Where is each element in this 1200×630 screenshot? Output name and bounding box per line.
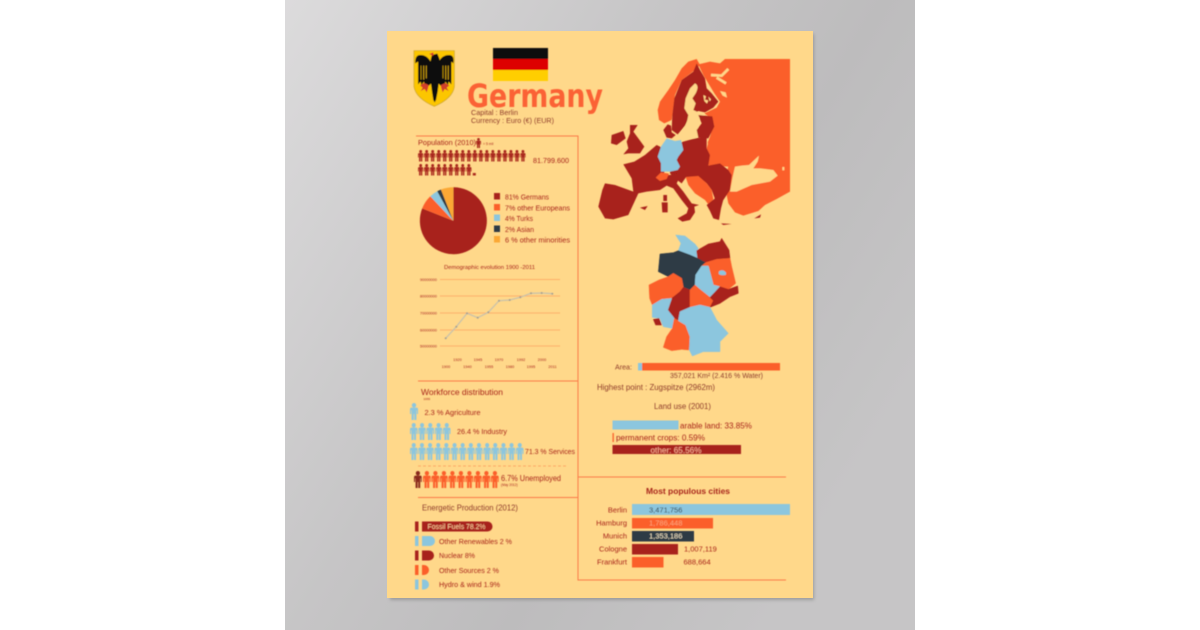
area value: 357,021 Km² (2.416 % Water) [670, 371, 763, 380]
y axis labels: 60000000 [420, 328, 437, 332]
x axis labels: 1992 [517, 358, 525, 362]
highest point: Highest point : Zugspitze (2962m) [597, 383, 715, 392]
Norway [658, 59, 700, 123]
Cologne bar: 1,007,119 [684, 544, 717, 554]
Balkans [686, 176, 713, 207]
Ireland [611, 131, 626, 145]
workforce heading: Workforce distribution [421, 387, 503, 397]
x axis labels: 2000 [538, 358, 546, 362]
pie legend: 4% Turks [505, 214, 533, 223]
x axis labels: 1955 [485, 365, 493, 369]
workforce pictogram: agriculture [410, 403, 480, 420]
Baden-Wurttemberg [663, 318, 690, 351]
workforce pictogram: services: 71.3 % Services [525, 447, 575, 456]
energy bar: other renewables: Other Renewables 2 % [439, 537, 512, 546]
workforce pictogram: services [410, 443, 575, 460]
x axis labels: 1945 [474, 358, 482, 362]
area label: Area: [615, 362, 632, 372]
x axis labels: 1995 [527, 365, 535, 369]
energy bar: nuclear [415, 550, 475, 560]
land use heading: Land use (2001) [654, 402, 711, 411]
y axis labels [420, 278, 437, 348]
land use block [612, 402, 752, 455]
city bar chart [596, 504, 790, 568]
Brandenburg [702, 258, 736, 289]
Hesse [668, 287, 690, 321]
White Sea [711, 69, 728, 83]
y axis labels: 70000000 [420, 312, 437, 316]
Greece and islands [640, 195, 732, 225]
Frankfurt bar: Frankfurt [597, 558, 628, 566]
Bavaria [678, 305, 728, 356]
North Rhine-Westphalia [649, 273, 683, 305]
x axis labels: 2011 [548, 365, 557, 369]
x axis labels [442, 358, 557, 369]
land use bar: arable: arable land: 33.85% [680, 422, 752, 430]
northern Europe [658, 59, 790, 155]
Great Britain [623, 125, 644, 154]
cities heading: Most populous cities [646, 487, 730, 496]
icon: German coat of arms [414, 51, 454, 106]
Thuringia [690, 285, 713, 307]
Schleswig-Holstein [676, 235, 698, 258]
Sweden and Finland [672, 63, 718, 134]
y axis labels: 80000000 [420, 294, 437, 298]
x axis labels: 1920 [453, 358, 462, 362]
grey wall background [285, 0, 915, 630]
map: German states [649, 235, 738, 356]
area block [597, 362, 780, 392]
Hamburg bar [596, 518, 713, 528]
capital and currency: Capital : Berlin [471, 108, 518, 117]
Cologne bar: Cologne [599, 544, 627, 554]
energy bar: other sources: Other Sources 2 % [439, 566, 499, 575]
Lake Onega [720, 91, 727, 98]
pie legend: 6 % other minorities [505, 236, 570, 244]
area bar [638, 363, 780, 370]
energy bar: fossil fuels: Fossil Fuels 78.2% [428, 522, 486, 531]
land use bar: permanent crops: permanent crops: 0.59% [616, 434, 705, 442]
row of persons one [418, 150, 526, 162]
population pictogram [418, 138, 569, 176]
title: Germany [467, 77, 603, 115]
pie legend: 7% other Europeans [505, 204, 570, 212]
population heading: Population (2010) [418, 138, 476, 147]
Frankfurt bar: 688,664 [684, 558, 711, 566]
Finnish lakes [703, 95, 711, 104]
Denmark [663, 124, 676, 138]
Russia, Ukraine and Turkey [707, 125, 790, 216]
Munich bar [603, 531, 694, 542]
panel frame lines [416, 136, 786, 580]
energy bar: nuclear: Nuclear 8% [439, 551, 475, 560]
poster shadow [390, 34, 814, 600]
workforce year note: 1955 [424, 397, 431, 401]
Black Sea [730, 156, 778, 192]
unemployment pictogram: (May 2012) [501, 483, 518, 487]
land use bar: other: other: 65.56% [650, 446, 702, 455]
row of persons two [418, 164, 476, 176]
population line [445, 292, 553, 339]
Berlin bar: Berlin [608, 506, 627, 514]
southern Europe [598, 125, 790, 225]
unemployment pictogram [414, 471, 561, 488]
icon: flag of Germany [493, 48, 548, 81]
Munich bar: Munich [603, 532, 627, 540]
workforce pictogram: industry: 26.4 % Industry [457, 427, 507, 436]
energy bar: other renewables [415, 536, 512, 546]
Gulf of Bothnia and Baltic Sea [680, 83, 705, 138]
icon: legend person [476, 138, 481, 148]
Hamburg bar: 1,786,448 [649, 518, 682, 528]
Cyprus [754, 214, 761, 218]
pie legend: 2% Asian [505, 225, 534, 234]
poster sheet [387, 31, 813, 598]
capital and currency [471, 108, 554, 125]
energy bar: hydro and wind [415, 580, 500, 590]
line chart: demographic evolution [420, 265, 560, 369]
energy bar: hydro and wind: Hydro & wind 1.9% [439, 580, 500, 589]
workforce pictogram: agriculture: 2.3 % Agriculture [424, 408, 480, 417]
Rhineland-Palatinate [652, 298, 674, 328]
Saxony [710, 286, 738, 307]
France, Iberia and Italy [598, 145, 699, 222]
pie legend [494, 192, 570, 244]
chart title: Demographic evolution 1900 -2011 [444, 265, 535, 271]
x axis labels: 1940 [463, 365, 472, 369]
Berlin bar [608, 504, 790, 515]
capital and currency: Currency : Euro (€) (EUR) [471, 116, 554, 125]
energy heading: Energetic Production (2012) [422, 504, 518, 512]
Germany highlight [658, 138, 683, 172]
x axis labels: 1970 [495, 358, 503, 362]
Switzerland [656, 172, 669, 181]
Mecklenburg [697, 238, 730, 263]
map: Europe [598, 59, 790, 225]
workforce pictogram: industry [410, 423, 507, 440]
central and eastern EU [670, 137, 732, 200]
Russia north and Kola [698, 59, 790, 155]
Hamburg bar: Hamburg [596, 518, 627, 528]
chart gridlines [440, 280, 560, 346]
Munich bar: 1,353,186 [649, 532, 682, 540]
Frankfurt bar [597, 557, 711, 568]
Cologne bar [599, 544, 717, 554]
Saxony-Anhalt [695, 266, 720, 297]
Berlin [719, 270, 726, 275]
energy bar: other sources [415, 565, 499, 575]
pie legend: 81% Germans [505, 192, 549, 202]
x axis labels: 1980 [506, 365, 514, 369]
population value: 81.799.600 [533, 156, 569, 165]
dashed divider [418, 465, 568, 467]
Saarland [653, 318, 662, 325]
x axis labels: 1900 [442, 365, 450, 369]
Caspian Sea edge [782, 167, 784, 170]
pie chart: population origin [420, 187, 487, 254]
Lower Saxony [658, 251, 706, 290]
unemployment pictogram: 6.7% Unemployed [501, 474, 561, 483]
y axis labels: 90000000 [420, 278, 437, 282]
y axis labels: 50000000 [420, 344, 437, 348]
legend note: = 5 mil [483, 142, 494, 146]
Berlin bar: 3,471,756 [649, 506, 682, 514]
Baltic states [697, 115, 714, 138]
